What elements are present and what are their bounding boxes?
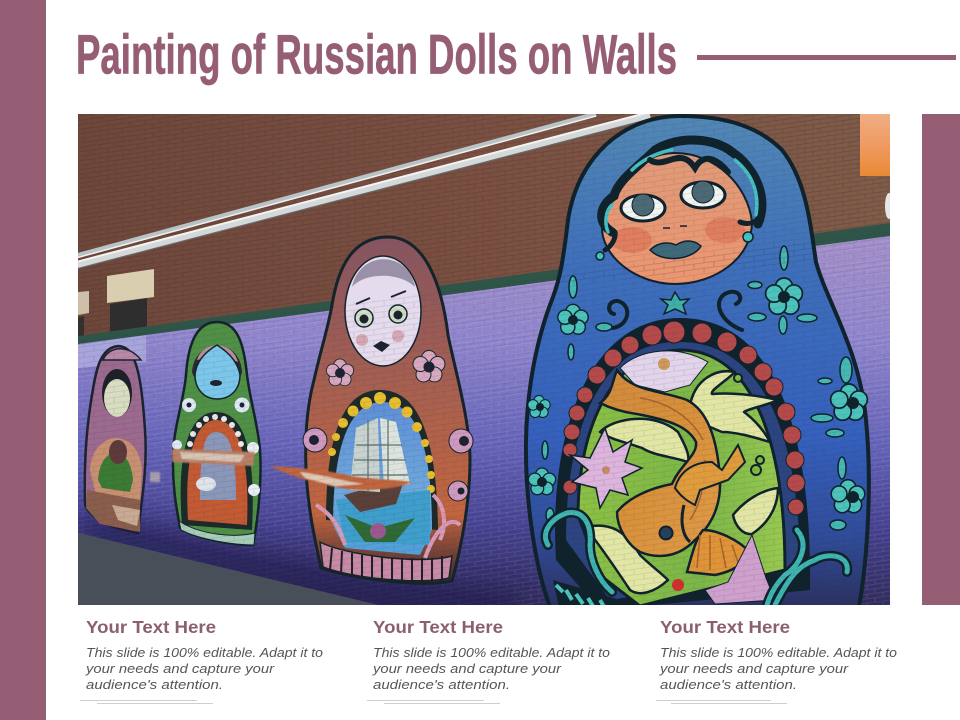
pavement <box>78 533 378 605</box>
cheeks <box>612 227 652 253</box>
nose <box>663 226 687 228</box>
star <box>661 292 689 314</box>
doll 1 worn base <box>86 490 140 532</box>
left eye <box>621 195 665 221</box>
doll 1: small pink <box>85 346 146 533</box>
doll 3: brown with ship <box>303 237 473 583</box>
doll 3 mouth <box>373 341 390 352</box>
heading 3: Your Text Here <box>660 617 790 637</box>
koi tail fin <box>687 530 750 575</box>
poppy sticker <box>672 579 684 591</box>
teal flowers <box>528 278 867 513</box>
green band <box>78 223 890 344</box>
teal waves <box>545 513 847 605</box>
doll 2 face <box>195 345 240 399</box>
koi gill <box>682 505 690 542</box>
left sidebar <box>0 0 46 720</box>
arch outline <box>555 318 810 610</box>
doll 2 base stripes <box>179 521 255 545</box>
doll 3 yellow dots <box>328 392 435 493</box>
body 1: your needs and capture your <box>85 661 275 676</box>
lilac left wall patch <box>78 335 146 368</box>
title rule <box>697 55 956 60</box>
doll 2 arch <box>181 412 253 530</box>
doll 1 arch <box>90 438 142 500</box>
heading 2: Your Text Here <box>373 617 503 637</box>
bubbles <box>734 374 764 475</box>
brick wall upper <box>78 114 890 354</box>
doll 3 arch <box>326 390 438 530</box>
koi scales <box>640 398 705 520</box>
caption column 2 <box>372 617 610 692</box>
earrings <box>596 252 604 260</box>
leaves <box>542 246 852 530</box>
doll 1 hood <box>103 349 141 360</box>
doll 3 flowers <box>303 350 473 501</box>
photo: mural of Russian dolls on brick wall <box>76 112 893 625</box>
green interior <box>578 350 785 606</box>
red dots <box>563 321 805 515</box>
teal base stripes <box>553 580 625 612</box>
doll 2 side flowers <box>247 442 259 454</box>
doll 3 ship <box>344 418 410 512</box>
brick texture over top of large doll <box>556 116 816 285</box>
face <box>602 153 752 284</box>
doll 3 cheeks <box>356 334 368 346</box>
koi side fin <box>675 445 745 505</box>
doll 2 headscarf <box>192 346 242 377</box>
doll 3 sea <box>336 490 430 545</box>
doll 3 brows <box>356 291 406 304</box>
right accent bar <box>922 114 960 605</box>
purple painted wall <box>78 230 890 605</box>
body 3: This slide is 100% editable. Adapt it to <box>660 645 897 660</box>
body 1: This slide is 100% editable. Adapt it to <box>86 645 323 660</box>
damaged paint streak <box>150 449 412 490</box>
lower pink lotus <box>705 535 775 604</box>
brick texture over murals <box>78 230 890 605</box>
caption column 3 <box>659 617 897 692</box>
doll 4: large blue with koi <box>526 116 869 612</box>
lips <box>650 241 701 259</box>
doll 2 bird <box>196 477 216 491</box>
pink lotus <box>570 428 642 508</box>
white lily <box>620 351 708 392</box>
doll 3 forehead pattern <box>352 259 415 287</box>
doll 3 eyes <box>355 309 373 327</box>
body 2: This slide is 100% editable. Adapt it to <box>373 645 610 660</box>
doll 1 face <box>102 369 132 417</box>
right eye <box>681 182 725 208</box>
koi body <box>600 370 720 556</box>
white wall fitting <box>885 193 890 219</box>
doll 3 base stripes <box>320 542 452 581</box>
fins <box>585 371 778 593</box>
body 2: audience's attention. <box>373 677 510 692</box>
heading 1: Your Text Here <box>86 617 216 637</box>
koi eye <box>660 526 672 540</box>
windows <box>78 269 154 340</box>
doll 3 face <box>345 256 421 366</box>
arch blue fill <box>566 342 800 600</box>
orange square <box>860 114 890 176</box>
scrolls <box>609 292 742 330</box>
body 3: audience's attention. <box>660 677 797 692</box>
body 2: your needs and capture your <box>372 661 562 676</box>
hair <box>602 140 762 250</box>
doll 2 flowers <box>182 398 196 412</box>
body 3: your needs and capture your <box>659 661 849 676</box>
doll 3 flower posy <box>345 515 415 542</box>
doll 2 white dots <box>187 414 244 447</box>
body 1: audience's attention. <box>86 677 223 692</box>
doll 2: green <box>172 322 261 545</box>
dark shadow at wall foot <box>78 510 520 625</box>
doll 3 scrolls <box>316 495 460 558</box>
caption column 1 <box>85 617 323 692</box>
pipes <box>76 112 650 269</box>
